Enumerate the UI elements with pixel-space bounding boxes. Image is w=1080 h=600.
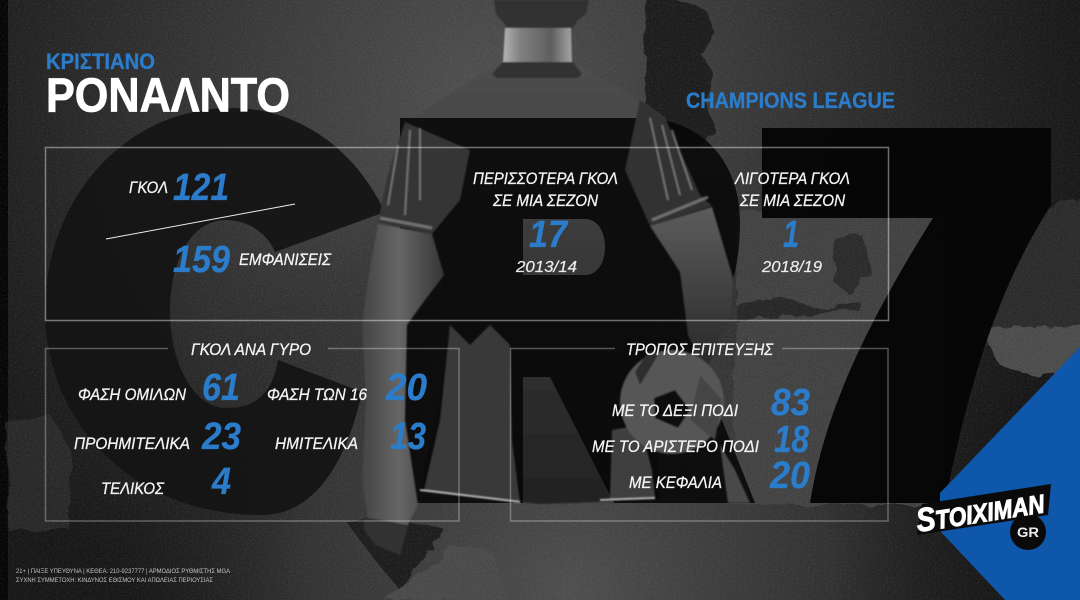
left sleeve: [378, 122, 470, 234]
torso and shorts: [378, 63, 700, 504]
left foot: [592, 419, 810, 461]
goals per appearances: 121: [173, 167, 229, 209]
neck: [503, 28, 572, 63]
final: ΤΕΛΙΚΟΣ: [101, 480, 165, 498]
headers: [629, 455, 810, 497]
panel: way of scoring: [510, 341, 888, 521]
headers: 20: [769, 455, 810, 497]
round of 16: ΦΑΣΗ ΤΩΝ 16: [267, 386, 368, 404]
semi finals: ΗΜΙΤΕΛΙΚΑ: [275, 435, 358, 453]
semi finals: 13: [390, 416, 426, 458]
round of 16: [267, 367, 427, 409]
quarter finals: ΠΡΟΗΜΙΤΕΛΙΚΑ: [74, 435, 190, 453]
fewest goals in a season: 1: [783, 214, 799, 256]
letter R: [400, 118, 755, 503]
fewest goals in a season: [734, 170, 850, 276]
quarter finals: [74, 416, 241, 458]
most goals in a season: 17: [529, 214, 569, 256]
panel heading: ΓΚΟΛ ΑΝΑ ΓΥΡΟ: [191, 341, 311, 359]
player torso: [378, 0, 700, 504]
panel: goals per round: [46, 341, 459, 521]
sleeve hems and stripes: [380, 118, 708, 228]
most goals in a season: ΠΕΡΙΣΣΟΤΕΡΑ ΓΚΟΛ: [473, 170, 618, 188]
right arm: [650, 207, 733, 372]
most goals in a season: [473, 170, 618, 276]
responsible gaming note: [16, 568, 231, 584]
panel: overall stats: [46, 148, 888, 320]
most goals in a season: ΣΕ ΜΙΑ ΣΕΖΟΝ: [492, 192, 598, 210]
player limbs: [362, 100, 750, 555]
fewest goals in a season: ΣΕ ΜΙΑ ΣΕΖΟΝ: [739, 192, 845, 210]
logo: Stoiximan GR: GR: [1017, 525, 1039, 540]
left foot: 18: [774, 419, 810, 461]
right foot: ΜΕ ΤΟ ΔΕΞΙ ΠΟΔΙ: [612, 402, 738, 420]
collar: [492, 62, 582, 78]
logo: Stoiximan GR: STOIXIMAN: [913, 482, 1048, 539]
head: [494, 0, 589, 32]
group stage: 61: [202, 367, 240, 409]
letter 7: [762, 128, 1051, 503]
goals per appearances: ΓΚΟΛ: [129, 179, 168, 197]
shorts folds: [424, 325, 520, 503]
blue corner triangle: [940, 347, 1080, 600]
semi finals: [275, 416, 426, 458]
headers: ΜΕ ΚΕΦΑΛΙΑ: [629, 474, 722, 492]
goals per appearances: [106, 167, 332, 281]
most goals in a season: 2013/14: [515, 259, 577, 276]
round of 16: 20: [385, 367, 427, 409]
final: [101, 461, 231, 503]
right hand: [720, 445, 750, 503]
final: 4: [211, 461, 231, 503]
fewest goals in a season: 2018/19: [761, 259, 822, 276]
goals per appearances: ΕΜΦΑΝΙΣΕΙΣ: [239, 251, 332, 269]
feet: [364, 517, 408, 555]
left foot: ΜΕ ΤΟ ΑΡΙΣΤΕΡΟ ΠΟΔΙ: [592, 438, 759, 456]
letter C: [45, 108, 385, 515]
group stage: [78, 367, 240, 409]
title: ΚΡΙΣΤΙΑΝΟ: [46, 49, 155, 74]
ball: [620, 350, 724, 454]
right foot: 83: [771, 382, 810, 424]
right foot: [612, 382, 810, 424]
watermark letters CR7: [45, 108, 1051, 515]
panel heading: ΤΡΟΠΟΣ ΕΠΙΤΕΥΞΗΣ: [626, 341, 774, 359]
title: ΡΟΝΑΛΝΤΟ: [46, 70, 290, 122]
goals per appearances: 159: [173, 239, 230, 281]
responsible gaming note: 21+ | ΠΑΙΞΕ ΥΠΕΥΘΥΝΑ | ΚΕΘΕΑ: 210-9237777 | ΑΡΜΟΔΙΟΣ ΡΥΘΜΙΣΤΗΣ ΜGA: [16, 568, 231, 575]
title: [46, 49, 290, 122]
left arm: [362, 224, 444, 525]
quarter finals: 23: [201, 416, 241, 458]
group stage: ΦΑΣΗ ΟΜΙΛΩΝ: [78, 386, 186, 404]
fewest goals in a season: ΛΙΓΟΤΕΡΑ ΓΚΟΛ: [734, 170, 850, 188]
responsible gaming note: ΣΥΧΝΗ ΣΥΜΜΕΤΟΧΗ: ΚΙΝΔΥΝΟΣ ΕΘΙΣΜΟΥ ΚΑΙ ΑΠΩΛΕΙΑΣ ΠΕΡΙΟΥΣΙΑΣ: [16, 577, 213, 584]
competition heading: CHAMPIONS LEAGUE: [686, 88, 895, 113]
right sleeve: [625, 100, 712, 226]
